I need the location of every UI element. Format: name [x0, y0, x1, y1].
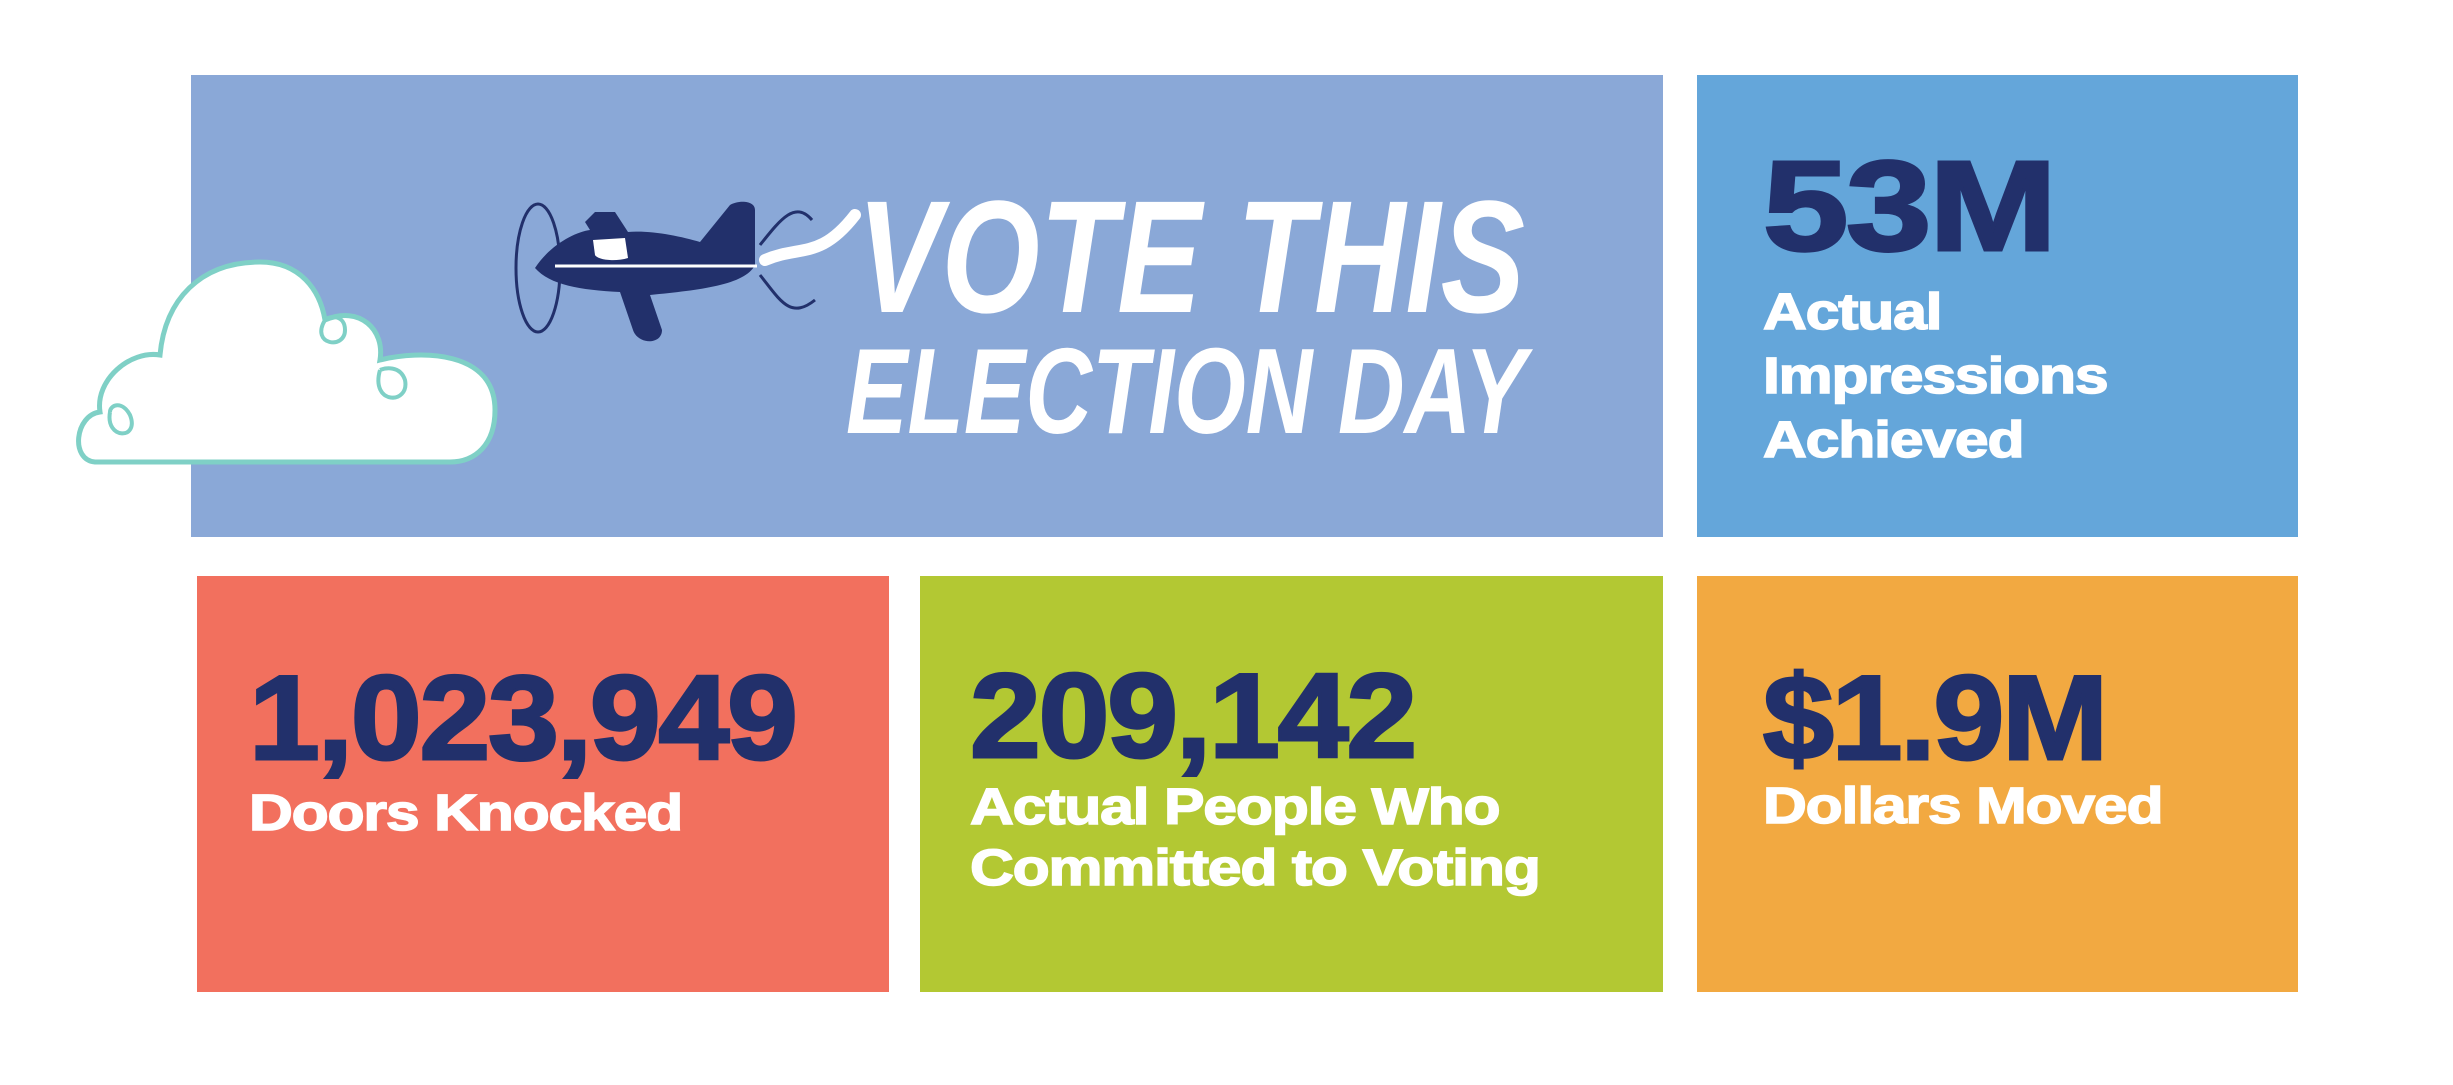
label: committed — [970, 778, 1540, 896]
panel: impressions — [1697, 75, 2298, 537]
number: 53M: 53M — [1763, 135, 2055, 278]
label: impressions: Actual — [1763, 283, 1941, 340]
number: committed: 209,142 — [970, 649, 1415, 783]
number: doors: 1,023,949 — [249, 651, 796, 785]
label: dollars: Dollars Moved — [1763, 777, 2162, 834]
label: impressions: Impressions — [1763, 347, 2107, 404]
label: committed: Committed to Voting — [970, 839, 1540, 896]
number: dollars: $1.9M — [1763, 651, 2106, 785]
panel: title — [191, 75, 1663, 537]
panel: committed — [920, 576, 1663, 992]
panel: doors — [197, 576, 889, 992]
heading: vote this election day: ELECTION DAY — [846, 323, 1533, 459]
label: impressions — [1763, 283, 2107, 468]
heading: vote this election day — [846, 167, 1533, 459]
label: doors: Doors Knocked — [249, 784, 682, 841]
panel: dollars — [1697, 576, 2298, 992]
heading: vote this election day: VOTE THIS — [857, 167, 1525, 346]
icon: cloud — [79, 262, 495, 462]
label: committed: Actual People Who — [970, 778, 1499, 835]
icon: airplane — [516, 202, 855, 341]
label: impressions: Achieved — [1763, 411, 2023, 468]
